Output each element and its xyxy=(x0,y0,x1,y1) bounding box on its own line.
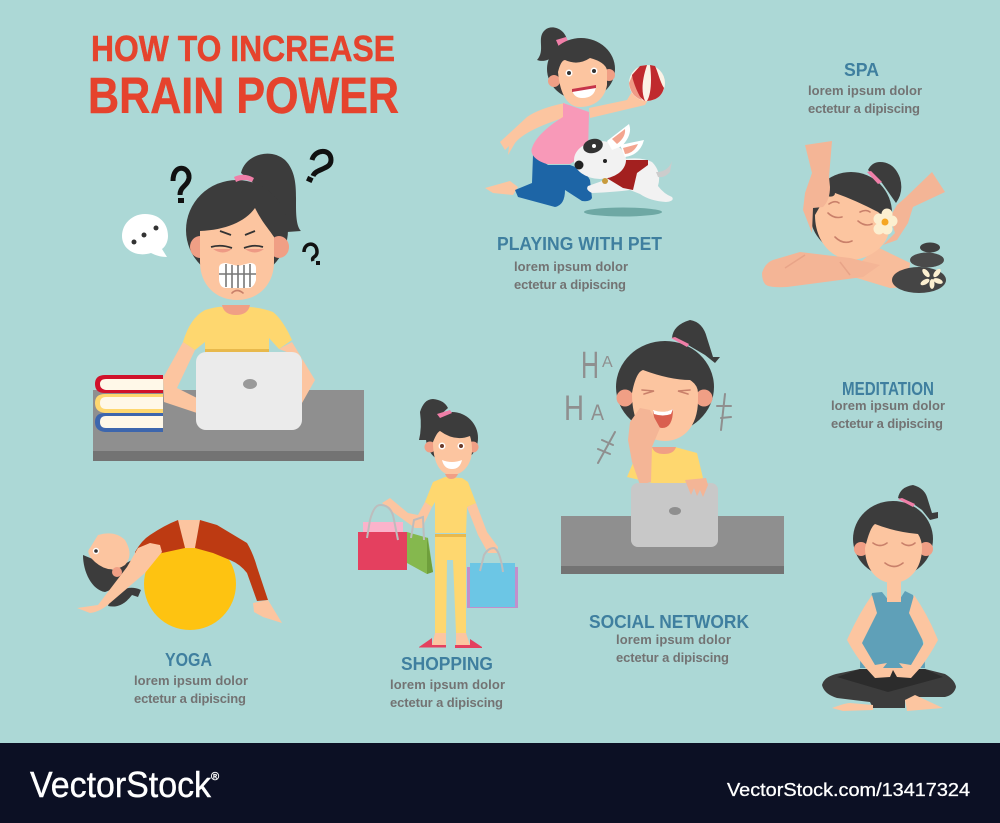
question marks xyxy=(173,151,331,265)
shopping bags xyxy=(358,505,518,608)
title xyxy=(88,28,399,124)
yoga woman on ball xyxy=(77,520,282,630)
laughter text: H xyxy=(564,389,584,428)
social network label: ectetur a dipiscing xyxy=(616,650,729,665)
social network label xyxy=(589,612,749,665)
shopping woman xyxy=(358,399,518,648)
desk xyxy=(93,390,364,461)
flower xyxy=(874,208,898,234)
meditation label: MEDITATION xyxy=(842,379,934,399)
hot stones xyxy=(892,242,946,293)
laughter text: A xyxy=(602,354,613,371)
meditation label xyxy=(831,379,945,431)
spa label: lorem ipsum dolor xyxy=(808,83,922,98)
yoga label: YOGA xyxy=(165,650,212,670)
watermark url: VectorStock.com/13417324 xyxy=(727,779,970,800)
meditation label: lorem ipsum dolor xyxy=(831,398,945,413)
shopping label: lorem ipsum dolor xyxy=(390,677,505,692)
laughter text: H xyxy=(581,345,599,387)
yoga label: lorem ipsum dolor xyxy=(134,673,248,688)
playing with pet label: lorem ipsum dolor xyxy=(514,259,628,274)
dog xyxy=(574,124,673,202)
laughter marks xyxy=(598,394,731,463)
spa label: ectetur a dipiscing xyxy=(808,101,920,116)
watermark logo: VectorStock xyxy=(30,764,212,805)
shopping label: SHOPPING xyxy=(401,654,493,674)
yoga label xyxy=(134,650,248,706)
title: HOW TO INCREASE xyxy=(91,28,395,69)
laughter text xyxy=(564,345,613,428)
laptop xyxy=(196,352,302,430)
watermark logo: ® xyxy=(211,771,219,783)
title: BRAIN POWER xyxy=(88,67,399,124)
laughing woman on laptop xyxy=(561,320,784,574)
shopping label xyxy=(390,654,505,710)
shopping label: ectetur a dipiscing xyxy=(390,695,503,710)
playing with pet illustration xyxy=(485,27,673,216)
spa label: SPA xyxy=(844,60,879,80)
laptop xyxy=(631,483,718,547)
social network label: SOCIAL NETWORK xyxy=(589,612,749,632)
social network label: lorem ipsum dolor xyxy=(616,632,731,647)
spa illustration xyxy=(762,141,946,293)
laughter text: A xyxy=(591,400,604,425)
speech bubble xyxy=(122,214,168,257)
playing with pet label xyxy=(497,234,662,292)
footer bar xyxy=(0,743,1000,823)
books xyxy=(95,375,163,432)
stressed woman at laptop xyxy=(93,151,364,461)
spa label xyxy=(808,60,922,116)
playing with pet label: ectetur a dipiscing xyxy=(514,277,626,292)
yoga label: ectetur a dipiscing xyxy=(134,691,246,706)
meditating woman xyxy=(822,485,956,711)
playing with pet label: PLAYING WITH PET xyxy=(497,234,662,254)
meditation label: ectetur a dipiscing xyxy=(831,416,943,431)
